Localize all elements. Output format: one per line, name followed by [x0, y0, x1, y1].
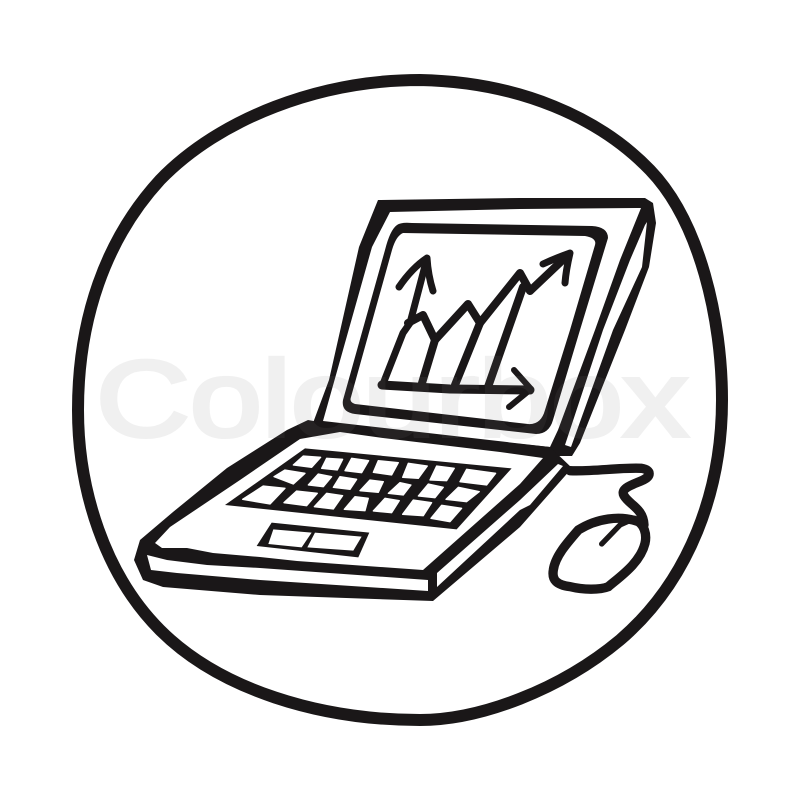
watermark: Colourbox — [96, 338, 688, 459]
screen frame — [343, 223, 608, 434]
side edge — [437, 464, 563, 587]
lid side highlight — [565, 222, 647, 447]
keys — [243, 456, 496, 522]
laptop lid — [308, 198, 656, 456]
keyboard — [225, 448, 512, 557]
circle outline — [78, 80, 722, 720]
laptop base — [134, 420, 572, 601]
front edge — [147, 555, 428, 591]
mouse and cable — [553, 468, 649, 589]
touchpad — [257, 523, 369, 557]
keyboard deck — [155, 432, 543, 570]
line chart with arrows — [382, 253, 570, 407]
